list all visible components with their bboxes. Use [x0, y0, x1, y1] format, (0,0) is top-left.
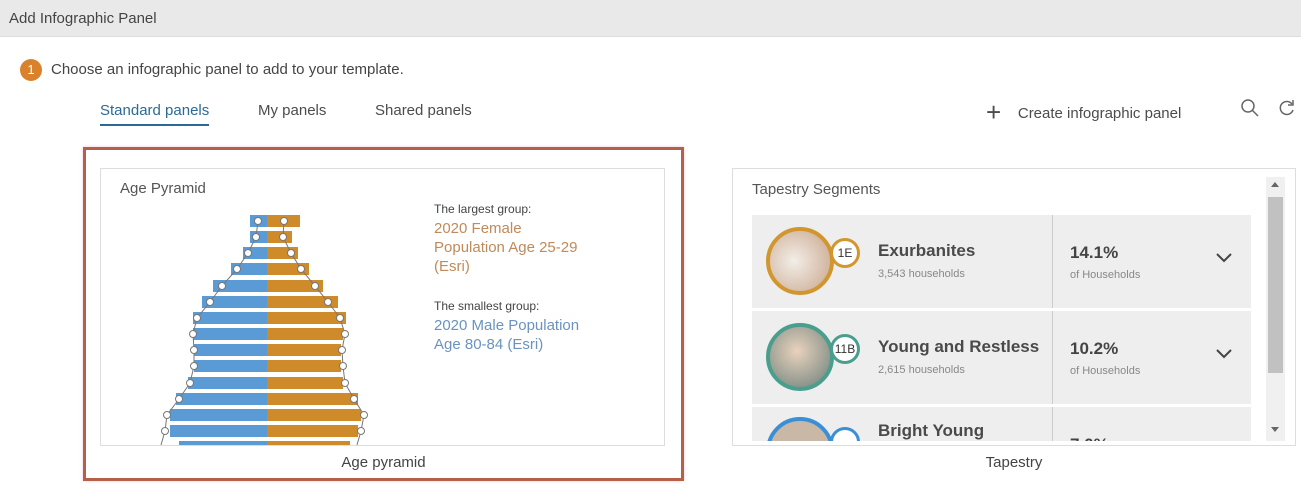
- row: Young and Restless: of Households: [1070, 365, 1140, 377]
- text: largest group: The largest group:: [434, 202, 531, 216]
- heading: Tapestry Segments: [752, 181, 880, 198]
- text: largest group: 2020 Female: [434, 220, 522, 237]
- badge: 1E: [838, 246, 852, 260]
- scrollbar: [1266, 177, 1285, 441]
- icon: step number: 1: [27, 62, 35, 77]
- text: largest group: [434, 202, 577, 275]
- row: Young and Restless: Young and Restless: [878, 337, 1039, 356]
- icon: segment photo: [766, 323, 834, 391]
- header bar: Add Infographic Panel: [9, 10, 157, 27]
- badge: [830, 238, 860, 268]
- icon: segment photo: [766, 227, 834, 295]
- row: Bright Young (partial): Bright Young: [878, 421, 984, 440]
- icon: chevron: [1216, 253, 1232, 262]
- panel: age pyramid (selected): [83, 147, 684, 481]
- row: Young and Restless: [752, 311, 1251, 404]
- tabs: [100, 102, 472, 126]
- tabs: My panels: [258, 102, 326, 119]
- icon: refresh: [1280, 100, 1294, 116]
- text: smallest group: Age 80-84 (Esri): [434, 336, 543, 353]
- icon: step number: [20, 59, 42, 81]
- badge: [830, 334, 860, 364]
- create panel button: + Create infographic panel: [986, 97, 1181, 127]
- row: Exurbanites: Exurbanites: [878, 241, 975, 260]
- text: largest group: (Esri): [434, 258, 470, 275]
- row: Bright Young (partial): [752, 407, 1251, 441]
- row: Exurbanites: 3,543 households: [878, 268, 965, 280]
- row: Exurbanites: [752, 215, 1251, 308]
- panel: tapestry: [732, 168, 1296, 446]
- text: smallest group: 2020 Male Population: [434, 317, 579, 334]
- header bar: [0, 0, 1301, 37]
- icon: search: [1241, 99, 1258, 116]
- badge: 11B: [835, 342, 855, 356]
- row: Young and Restless: 10.2%: [1070, 339, 1118, 358]
- text: largest group: Population Age 25-29: [434, 239, 577, 256]
- text: smallest group: [434, 299, 579, 353]
- card: [100, 168, 665, 446]
- icon: chevron: [1216, 349, 1232, 358]
- row: Exurbanites: of Households: [1070, 269, 1140, 281]
- step instruction: Choose an infographic panel to add to your template.: [51, 61, 404, 78]
- tabs: Standard panels: [100, 102, 209, 119]
- heading: Age Pyramid: [120, 180, 206, 197]
- row: Exurbanites: 14.1%: [1070, 243, 1118, 262]
- text: smallest group: The smallest group:: [434, 299, 539, 313]
- caption: tapestry: Tapestry: [986, 454, 1042, 471]
- tabs: Shared panels: [375, 102, 472, 119]
- caption: Age pyramid: [341, 454, 426, 471]
- row: Young and Restless: 2,615 households: [878, 364, 965, 376]
- chart: pyramid: [160, 215, 368, 445]
